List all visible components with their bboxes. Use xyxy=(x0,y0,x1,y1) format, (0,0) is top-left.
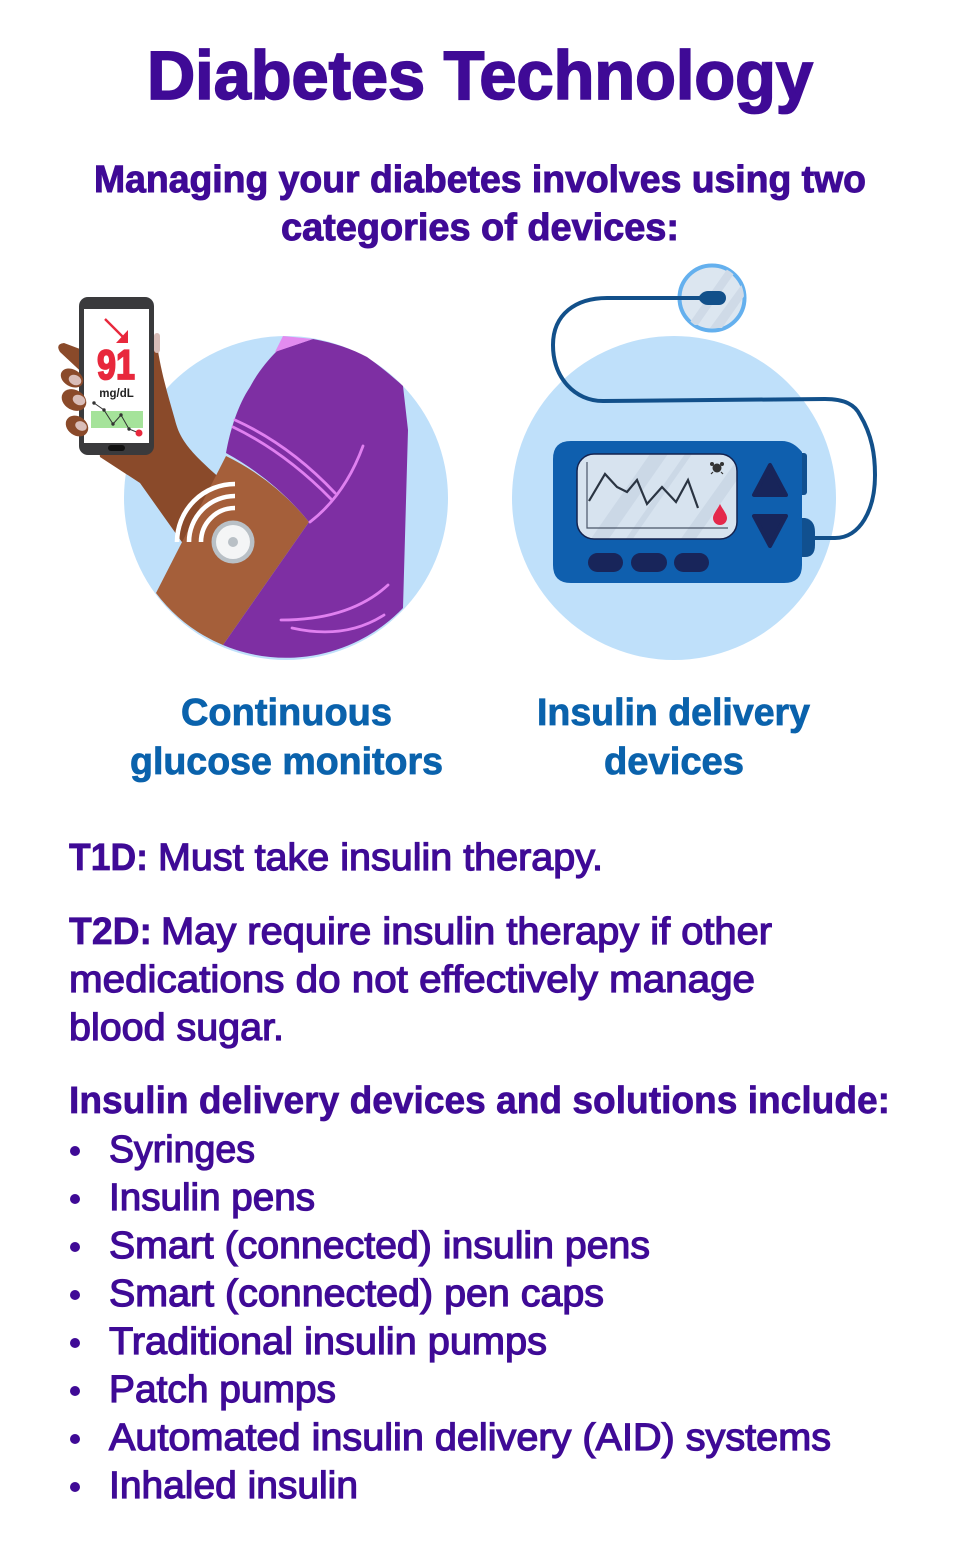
text: T2D: May require insulin therapy if other xyxy=(161,911,772,953)
list: insulin delivery devices xyxy=(70,1129,831,1507)
subtitle: categories of devices: xyxy=(281,207,679,249)
title: Diabetes Technology xyxy=(147,37,813,114)
tube connector xyxy=(800,518,815,557)
label: continuous glucose monitors xyxy=(130,692,443,783)
glucose trend chart xyxy=(91,401,143,436)
infusion patch xyxy=(680,266,745,330)
collar xyxy=(275,336,313,352)
text: T2D: blood sugar. xyxy=(69,1007,284,1049)
subtitle xyxy=(94,159,866,249)
list: insulin delivery devices: Insulin pens xyxy=(109,1177,315,1219)
thumb nail xyxy=(154,333,160,353)
screen xyxy=(577,454,737,540)
illustration: continuous glucose monitor xyxy=(57,297,448,660)
garment seams xyxy=(233,420,388,632)
purple sleeve xyxy=(223,339,408,658)
list: insulin delivery devices: Smart (connected) pen caps xyxy=(109,1273,604,1315)
list: insulin delivery devices: Traditional insulin pumps xyxy=(109,1321,547,1363)
background circle xyxy=(124,336,448,660)
pump body xyxy=(553,441,802,583)
illustration: insulin pump xyxy=(512,266,875,660)
label: continuous glucose monitors: Continuous xyxy=(181,692,392,734)
tubing xyxy=(553,298,875,538)
sensor xyxy=(212,520,254,564)
text: T2D: T2D: xyxy=(69,911,152,953)
list: insulin delivery devices: Patch pumps xyxy=(109,1369,336,1411)
list: insulin delivery devices: Automated insulin delivery (AID) systems xyxy=(109,1417,831,1459)
alarm icon xyxy=(710,462,724,474)
glucose reading: 91 xyxy=(97,341,135,388)
text: T1D: T1D: xyxy=(69,837,148,879)
signal arcs xyxy=(177,484,235,542)
forearm and hand xyxy=(58,337,222,545)
soft buttons xyxy=(588,553,709,572)
upper arm xyxy=(156,456,309,645)
unit: mg/dL xyxy=(99,388,134,400)
label: insulin delivery devices: Insulin delivery xyxy=(537,692,810,734)
text: T2D xyxy=(69,911,772,1049)
list heading: Insulin delivery devices and solutions include: xyxy=(69,1080,890,1122)
text: T1D: Must take insulin therapy. xyxy=(158,837,603,879)
list: insulin delivery devices: Inhaled insulin xyxy=(109,1465,358,1507)
list: insulin delivery devices: Smart (connected) insulin pens xyxy=(109,1225,650,1267)
up and down buttons xyxy=(754,465,786,546)
phone xyxy=(79,297,154,455)
patch cannula xyxy=(698,291,726,305)
background circle xyxy=(512,336,836,660)
label: insulin delivery devices xyxy=(537,692,810,783)
label: continuous glucose monitors: glucose monitors xyxy=(130,741,443,783)
trend arrow xyxy=(105,319,128,343)
list: insulin delivery devices: Syringes xyxy=(109,1129,255,1171)
label: insulin delivery devices: devices xyxy=(604,741,744,783)
fingers xyxy=(57,365,92,441)
text: T2D: medications do not effectively manage xyxy=(69,959,755,1001)
blood drop icon xyxy=(713,504,727,525)
subtitle: Managing your diabetes involves using two xyxy=(94,159,866,201)
screen chart xyxy=(587,462,728,528)
side button xyxy=(796,453,807,495)
